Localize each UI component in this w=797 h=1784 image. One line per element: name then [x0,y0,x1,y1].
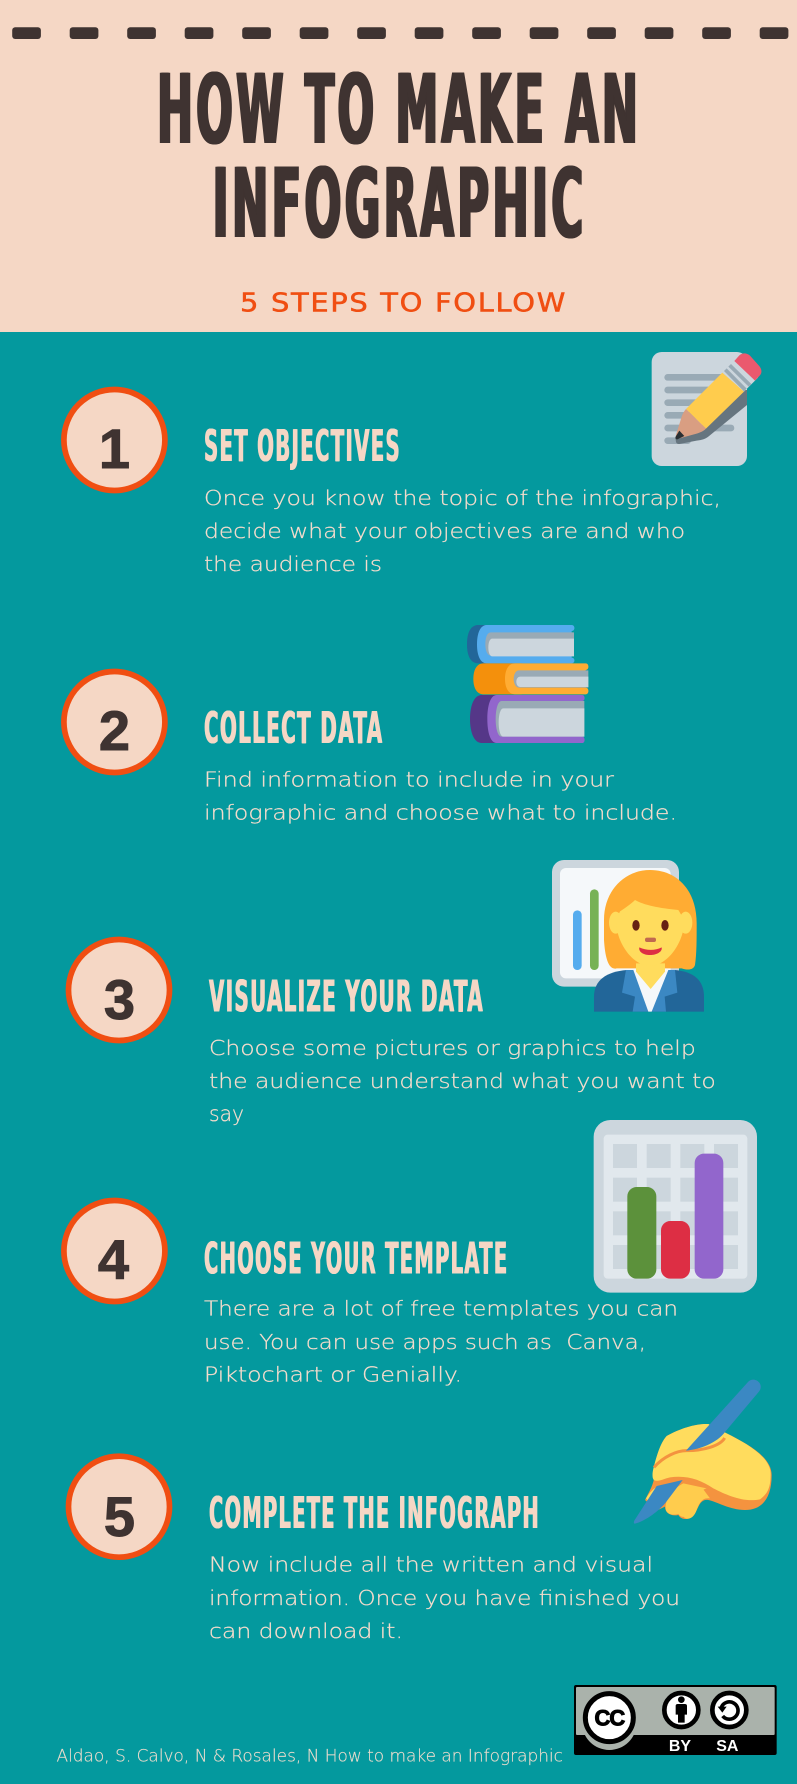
body text step 3: Choose some pictures or graphics to help [209,1036,696,1060]
body text step 4: There are a lot of free templates you can [204,1296,678,1320]
body text step 3: the audience understand what you want to [209,1069,716,1093]
step number badge 5: 5 [104,1485,135,1548]
body text step 4: use. You can use apps such as Canva, [204,1330,646,1354]
panel: header [0,0,797,332]
step number badge 3 [68,940,170,1040]
step number badge 4 [64,1200,165,1302]
icon: creative commons BY-SA badge [574,1685,777,1755]
panel: step 2 collect data: COLLECT DATA [204,704,384,754]
body text step 1 [204,486,721,576]
body text step 1: decide what your objectives are and who [204,519,685,543]
panel: step 2 collect data [64,625,677,824]
body text step 2: Find information to include in your [204,768,615,792]
body text step 5: information. Once you have finished you [209,1586,680,1610]
step number badge 5 [68,1456,170,1557]
footer credit: Aldao, S. Calvo, N & Rosales, N How to make an Infographic [56,1746,563,1766]
body text step 3 [209,1036,716,1127]
step number badge 2 [64,672,165,772]
body text step 5: Now include all the written and visual [209,1552,653,1576]
panel: step 3 visualize your data: VISUALIZE YOUR DATA [209,972,484,1022]
panel: step 4 choose your template [64,1120,757,1386]
icon: bar chart on grid [594,1120,757,1293]
icon: stack of books [467,625,588,743]
icon: presenter with chart board [552,860,704,1012]
body text step 2: infographic and choose what to include. [204,800,677,824]
subtitle: 5 STEPS TO FOLLOW [240,288,567,318]
panel: step 1 set objectives: SET OBJECTIVES [204,422,401,472]
step number badge 3: 3 [104,968,135,1031]
body text step 1: Once you know the topic of the infographic, [204,486,721,510]
panel: step 1 set objectives [64,352,761,576]
icon: document and pencil [652,352,761,466]
icon: creative commons BY-SA badge: SA [716,1738,739,1755]
body text step 1: the audience is [204,552,382,576]
body text step 4: Piktochart or Genially. [204,1362,462,1386]
body text step 5 [209,1552,680,1643]
title [157,54,641,260]
body text step 3: say [209,1102,244,1127]
panel: step 5 complete the infograph [68,1380,772,1643]
icon: creative commons BY-SA badge: CC [594,1705,625,1730]
step number badge 4: 4 [98,1228,129,1291]
step number badge 2: 2 [99,699,130,762]
body text step 5: can download it. [209,1619,403,1643]
icon: creative commons BY-SA badge: BY [669,1738,691,1755]
step number badge 1: 1 [99,417,130,480]
panel: step 3 visualize your data [68,860,716,1127]
step number badge 1 [64,390,165,490]
icon: hand writing with pen [634,1380,772,1524]
body text step 4 [204,1296,678,1386]
body text step 2 [204,768,677,824]
